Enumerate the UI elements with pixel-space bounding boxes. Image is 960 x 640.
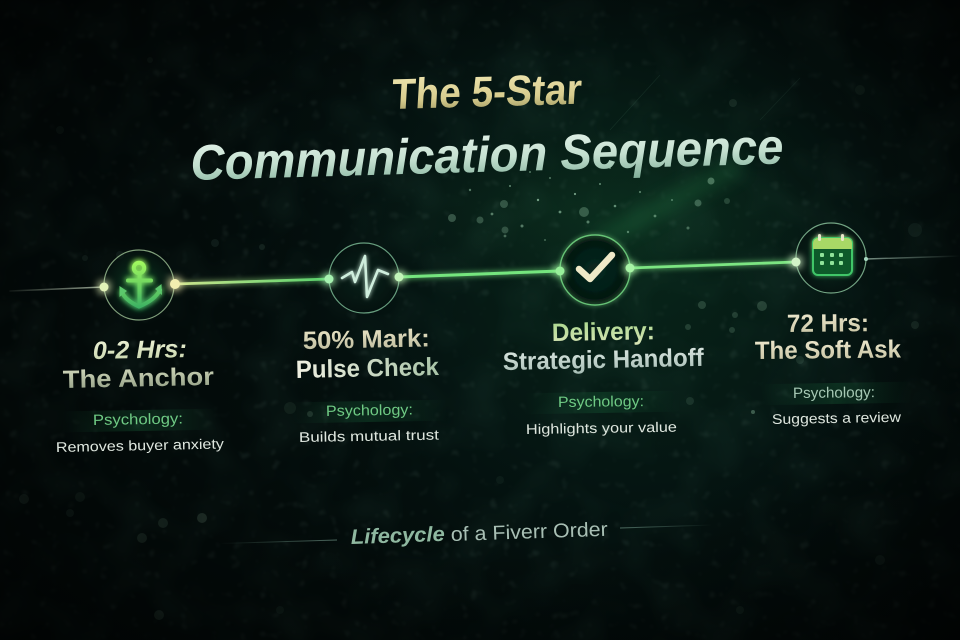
psychology label: Psychology: bbox=[93, 410, 183, 429]
heading: The Soft Ask bbox=[755, 335, 901, 365]
icon: pulse bbox=[324, 243, 404, 313]
description: Builds mutual trust bbox=[299, 427, 439, 445]
icon: anchor bbox=[100, 250, 180, 320]
description: Highlights your value bbox=[526, 419, 677, 437]
heading: 0-2 Hrs: bbox=[93, 335, 187, 365]
icon: check mark bbox=[556, 235, 634, 305]
title bbox=[190, 66, 784, 191]
psychology label bbox=[525, 391, 680, 414]
heading: The Anchor bbox=[63, 363, 214, 394]
footer caption: of a Fiverr Order bbox=[450, 519, 608, 546]
psychology label bbox=[762, 382, 912, 405]
footer caption: Lifecycle bbox=[350, 523, 445, 549]
footer caption bbox=[220, 519, 712, 549]
psychology label bbox=[292, 400, 447, 423]
heading: 50% Mark: bbox=[303, 324, 430, 355]
heading: 72 Hrs: bbox=[787, 309, 869, 338]
heading bbox=[755, 309, 901, 365]
heading: Strategic Handoff bbox=[503, 344, 705, 376]
psychology label bbox=[62, 409, 217, 432]
title: The 5-Star bbox=[390, 66, 583, 119]
description: Removes buyer anxiety bbox=[56, 435, 224, 455]
timeline line bbox=[10, 256, 960, 291]
heading bbox=[296, 324, 439, 384]
icon: calendar bbox=[792, 223, 868, 293]
psychology label: Psychology: bbox=[558, 393, 644, 411]
step 1: the anchor bbox=[56, 250, 224, 455]
psychology label: Psychology: bbox=[326, 401, 413, 420]
description: Suggests a review bbox=[772, 409, 902, 427]
heading bbox=[63, 335, 214, 394]
step 3: strategic handoff bbox=[503, 235, 705, 437]
step 4: the soft ask bbox=[755, 223, 912, 427]
psychology label: Psychology: bbox=[793, 384, 875, 402]
title: Communication Sequence bbox=[190, 118, 784, 191]
step 2: pulse check bbox=[292, 243, 447, 445]
heading bbox=[503, 317, 705, 376]
heading: Delivery: bbox=[552, 317, 655, 347]
heading: Pulse Check bbox=[296, 353, 439, 384]
